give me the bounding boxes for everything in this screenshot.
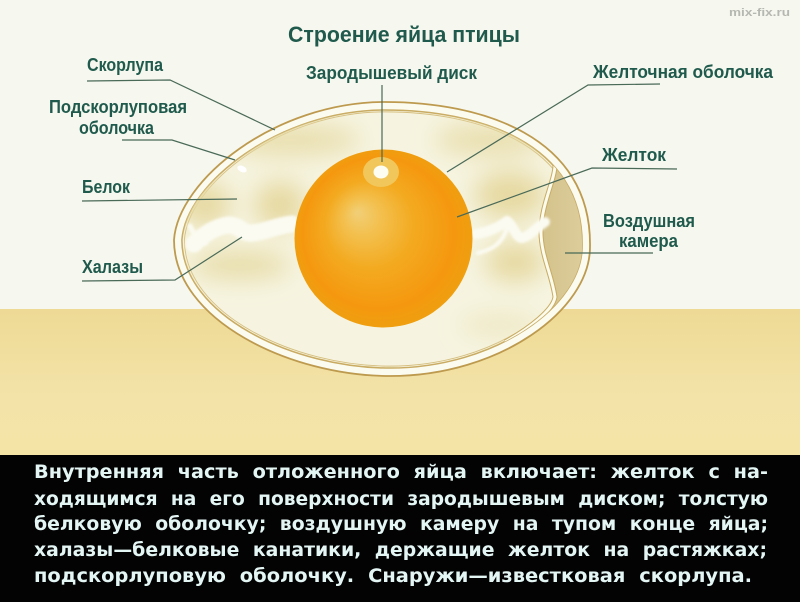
illustration: egg diagram (0, 7, 800, 455)
background sand (0, 309, 800, 455)
label: shell: Скорлупа (87, 55, 164, 75)
label: subshell membrane line 2: оболочка (79, 118, 155, 138)
label: albumen: Белок (82, 177, 131, 197)
caption text (34, 461, 768, 587)
egg white shading (179, 124, 546, 335)
germinal disc (363, 157, 399, 187)
chalazae (190, 221, 545, 253)
yolk (294, 150, 472, 328)
label: air chamber: Воздушная (603, 211, 695, 231)
caption text: подскорлуповую оболочку. Снаружи—известковая скорлупа. (34, 565, 752, 587)
highlight on egg white (236, 164, 248, 174)
label: yolk: Желток (601, 145, 667, 165)
watermark: mix-fix.ru (729, 7, 790, 19)
caption panel (0, 455, 800, 602)
label: air chamber line 2: камера (619, 231, 679, 251)
egg shell (174, 102, 590, 376)
leader lines (82, 80, 677, 281)
label: chalazae: Халазы (82, 257, 143, 277)
caption text: ходящимся на его поверхности зародышевым диском; толстую (34, 488, 768, 510)
air chamber (504, 166, 582, 342)
label: vitelline membrane: Желточная оболочка (592, 62, 774, 82)
labels (49, 55, 774, 277)
title: Строение яйца птицы (288, 22, 520, 47)
caption text: белковую оболочку; воздушную камеру на тупом конце яйца; (34, 513, 768, 535)
label: germinal disc: Зародышевый диск (306, 63, 478, 83)
caption text: халазы—белковые канатики, держащие желток на растяжках; (34, 539, 767, 561)
label: subshell membrane: Подскорлуповая (49, 97, 187, 117)
caption text: Внутренняя часть отложенного яйца включает: желток с на- (34, 461, 768, 483)
